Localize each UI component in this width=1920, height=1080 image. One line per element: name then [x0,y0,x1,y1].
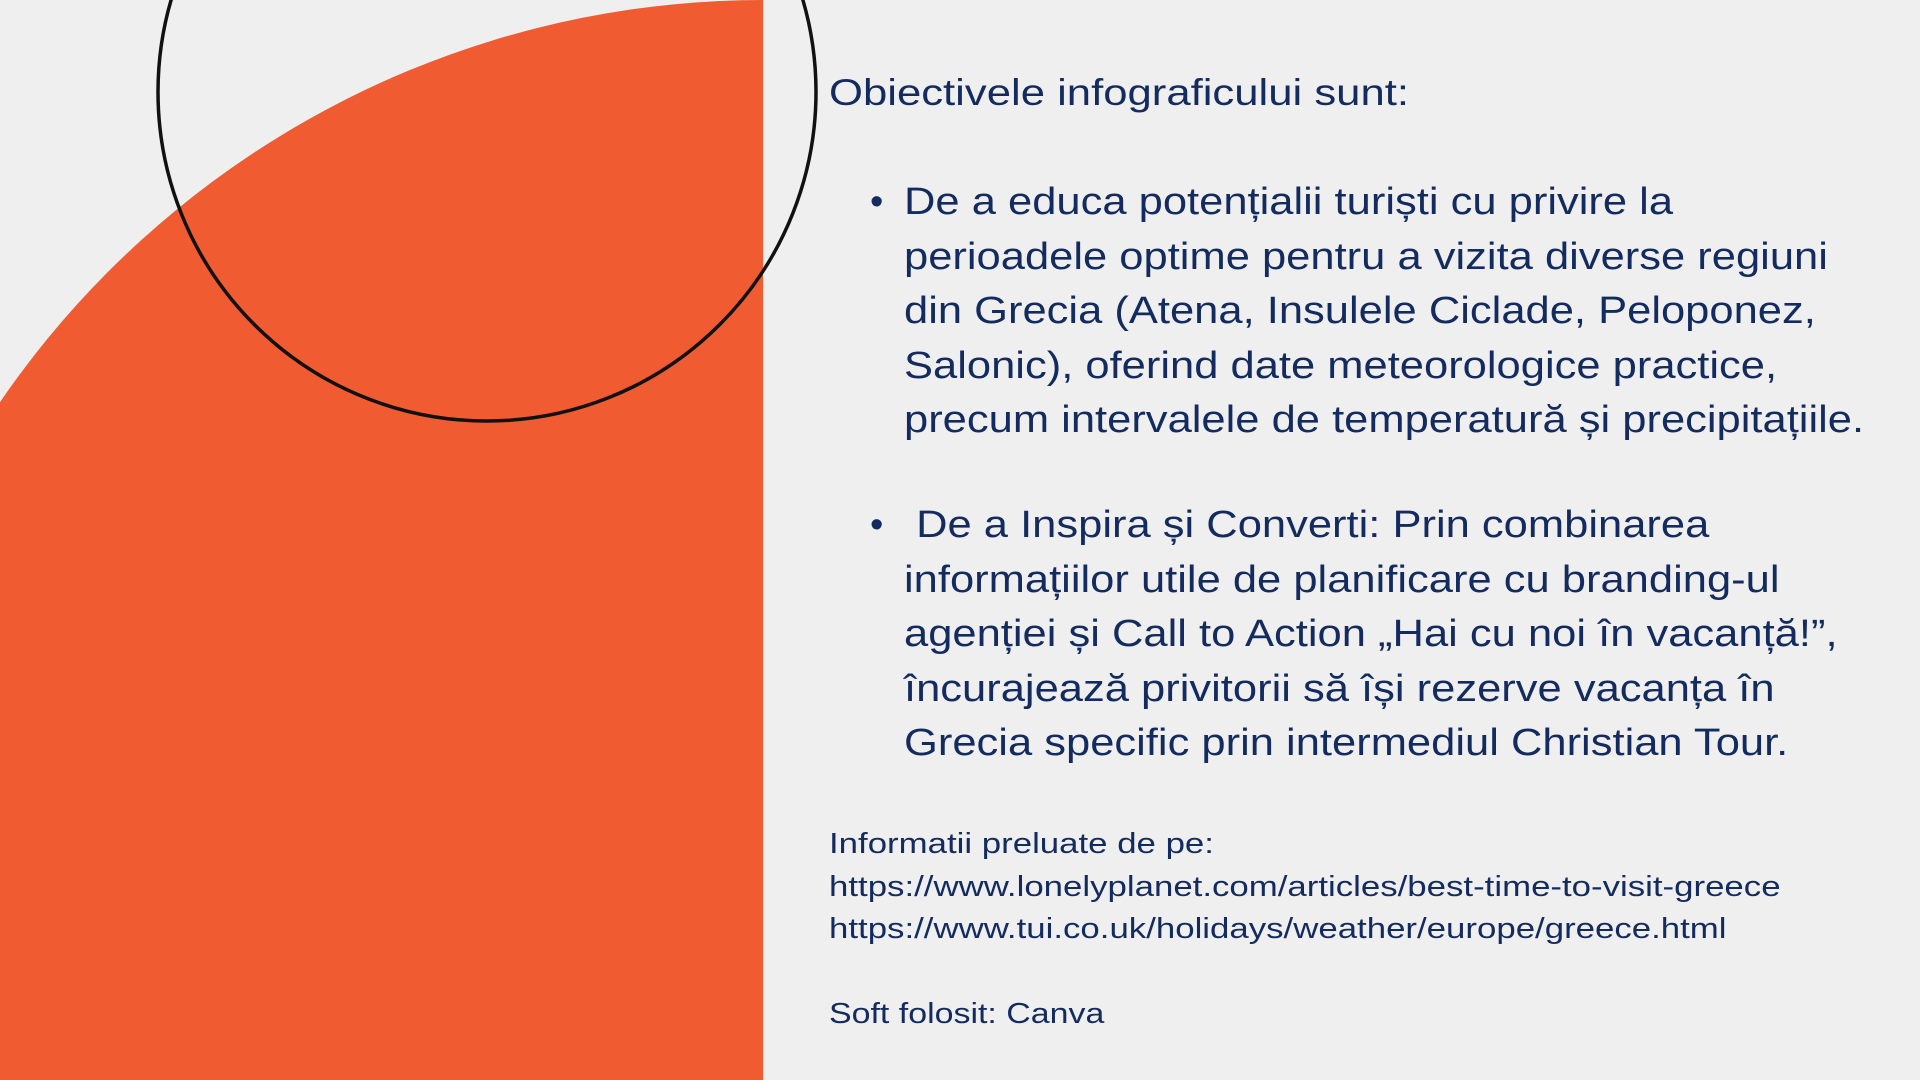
bullet 1: perioadele optime pentru a vizita diverse regiuni [904,236,1828,278]
bullet 1: De a educa potențialii turiști cu privire la [904,181,1673,223]
bullet 1 [870,181,1864,441]
bullet 2: Grecia specific prin intermediul Christian Tour. [904,722,1788,764]
bullet 1: Salonic), oferind date meteorologice practice, [904,344,1777,386]
bullet 1: din Grecia (Atena, Insulele Ciclade, Peloponez, [904,290,1816,332]
bullet 2 [870,504,1838,764]
bullet 2: agenției și Call to Action „Hai cu noi în vacanță!”, [904,613,1838,655]
sources [829,828,1781,945]
bullet 1: precum intervalele de temperatură și precipitațiile. [904,399,1864,441]
sources: Informatii preluate de pe: [829,828,1214,860]
bullet 2: informațiilor utile de planificare cu branding-ul [904,558,1779,600]
orange shape with black circle [0,0,818,1080]
bullet 2: • [870,504,883,546]
bullet 2: De a Inspira și Converti: Prin combinarea [916,504,1709,546]
sources: https://www.lonelyplanet.com/articles/best-time-to-visit-greece [829,870,1781,902]
title: Obiectivele infograficului sunt: [829,72,1409,113]
sources: https://www.tui.co.uk/holidays/weather/europe/greece.html [829,913,1727,945]
software note: Soft folosit: Canva [829,998,1104,1030]
bullet 1: • [870,181,883,223]
black outline circle [158,0,816,421]
bullet 2: încurajează privitorii să își rezerve vacanța în [904,668,1775,710]
orange quarter circle [0,0,763,1080]
